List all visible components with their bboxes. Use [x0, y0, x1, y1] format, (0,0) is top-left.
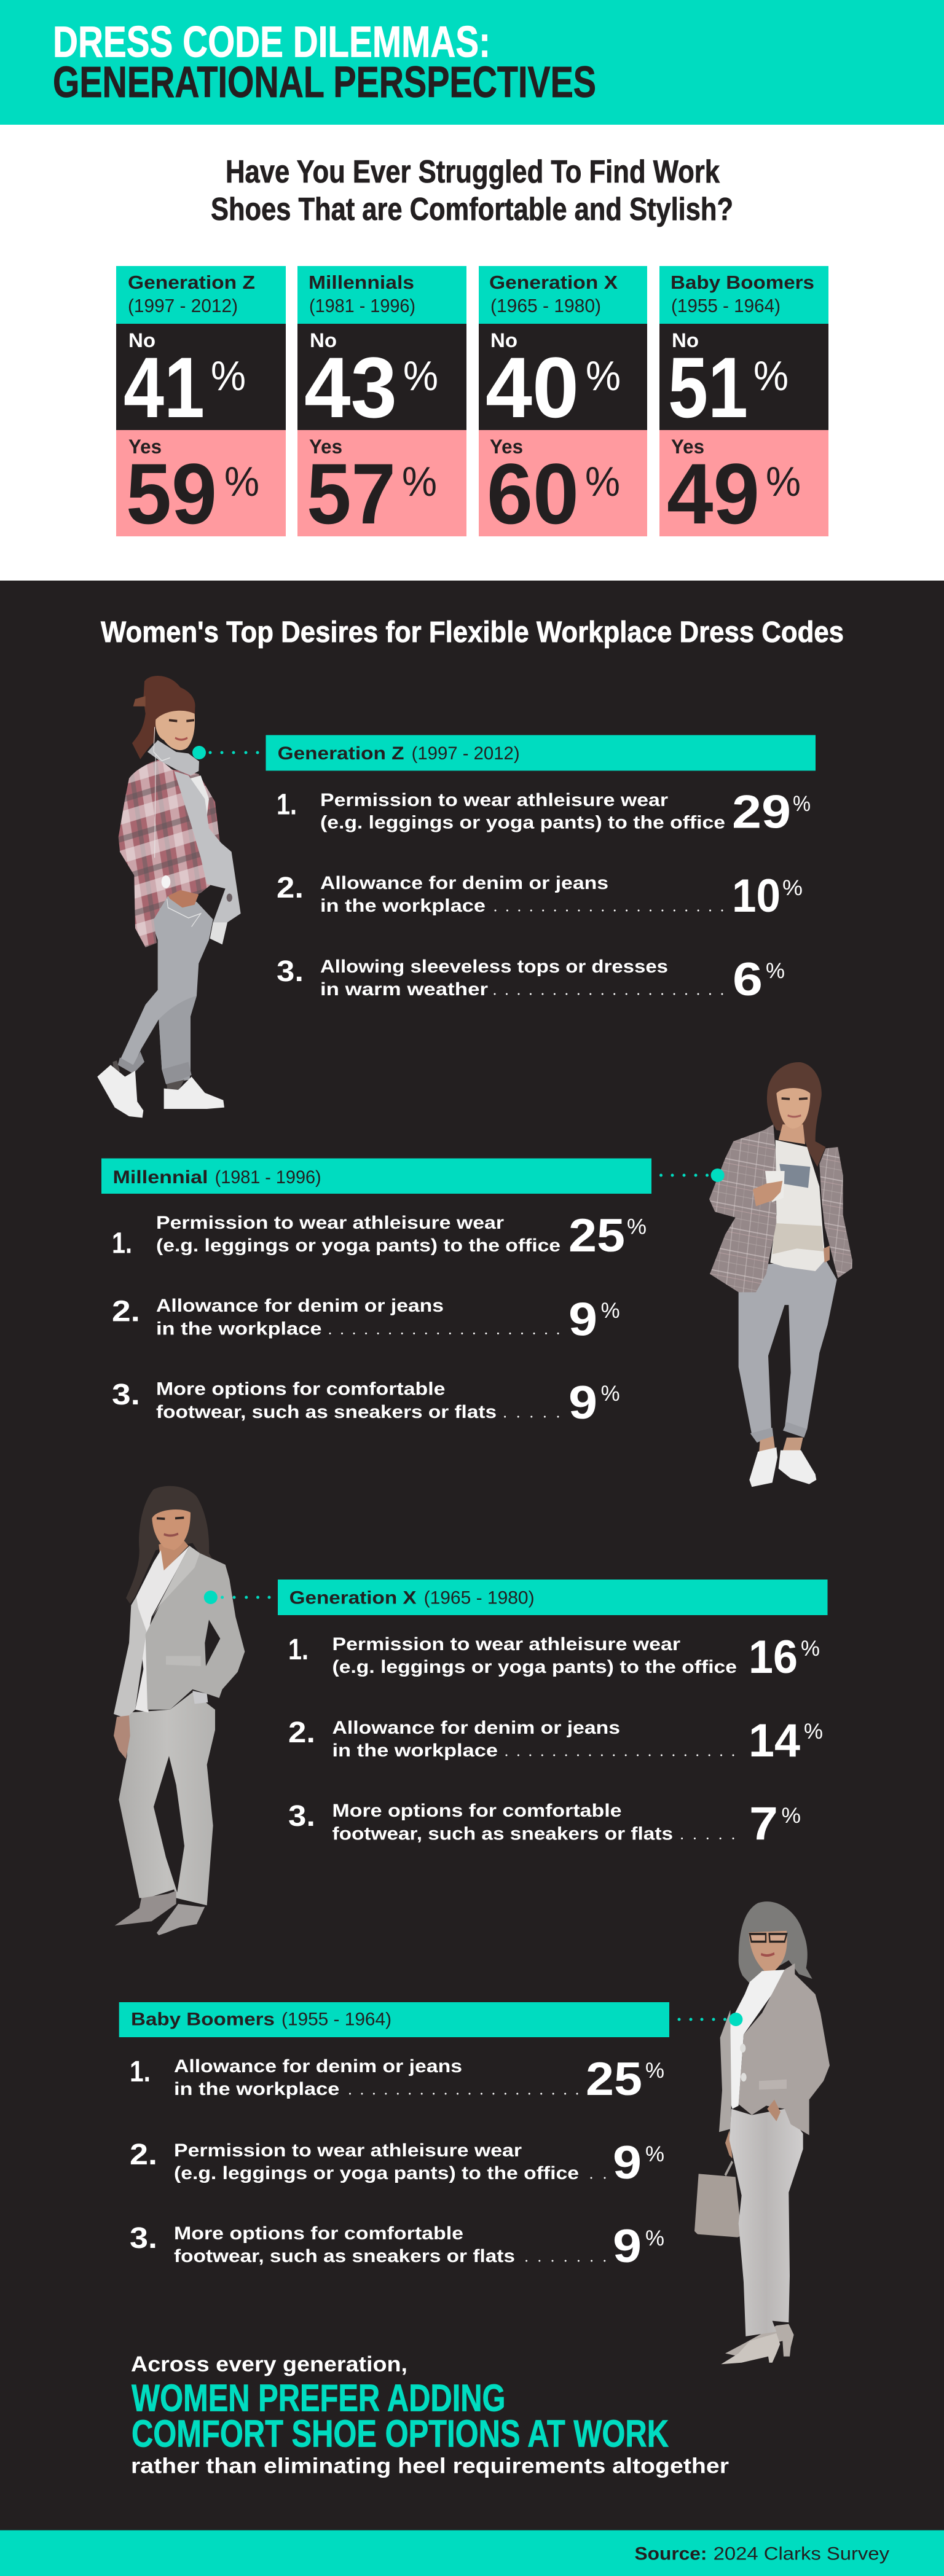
ranked item 3: footwear 7%: More options for comfortable — [332, 1801, 622, 1821]
survey question heading — [211, 154, 733, 227]
ranked item 3: footwear 9%: 9 — [613, 2220, 642, 2273]
heading bar: Generation X — [278, 1580, 827, 1615]
ranked item 1: denim 25%: 25 — [586, 2053, 642, 2105]
ranked item 1: athleisure 16%: (e.g. leggings or yoga pants) to the office — [332, 1657, 737, 1677]
ranked item 2: denim 14%: 14 — [749, 1715, 800, 1767]
connector: Generation Z — [192, 746, 259, 759]
panel: Millennial desires — [101, 1159, 725, 1429]
panel: Generation Z stat card — [116, 266, 286, 542]
panel: Baby Boomers stat card: Baby Boomers — [671, 272, 814, 293]
panel: Generation X stat card: 40 — [486, 339, 579, 436]
panel: Generation X stat card: (1965 - 1980) — [490, 295, 601, 316]
ranked item 3: sleeveless 6%: Allowing sleeveless tops or dresses — [320, 957, 668, 977]
ranked item 1: denim 25%: Allowance for denim or jeans — [174, 2056, 462, 2077]
ranked item 2: denim 10%: 10 — [732, 870, 781, 922]
title banner: GENERATIONAL PERSPECTIVES — [53, 58, 596, 107]
ranked item 2: denim 10%: % — [782, 876, 803, 900]
ranked item 1: denim 25% — [130, 2053, 664, 2105]
heading bar: Baby Boomers: Baby Boomers — [131, 2010, 275, 2030]
panel: Generation Z stat card: % — [224, 458, 259, 505]
ranked item 3: sleeveless 6%: in warm weather — [320, 979, 488, 1000]
ranked item 2: athleisure 9%: % — [645, 2142, 664, 2166]
panel: Generation X stat card: Yes — [490, 436, 523, 458]
panel: Generation X stat card: % — [586, 353, 621, 399]
panel: Millennials stat card: 43 — [304, 339, 397, 436]
ranked item 2: denim 14%: % — [804, 1720, 823, 1744]
ranked item 2: denim 14%: in the workplace — [332, 1740, 498, 1761]
ranked item 3: sleeveless 6%: 6 — [733, 953, 763, 1006]
survey question heading: Shoes That are Comfortable and Stylish? — [211, 192, 733, 227]
ranked item 1: athleisure 29%: Permission to wear athleisure wear — [320, 790, 668, 810]
ranked item 3: sleeveless 6%: % — [766, 959, 785, 983]
panel: Millennials stat card: Millennials — [309, 272, 414, 293]
survey question heading: Have You Ever Struggled To Find Work — [226, 154, 720, 190]
panel: Millennials stat card: 57 — [307, 445, 396, 542]
panel: Baby Boomers stat card — [659, 266, 828, 542]
ranked item 1: athleisure 29% — [277, 786, 811, 838]
ranked item 2: denim 9%: Allowance for denim or jeans — [156, 1296, 444, 1316]
ranked item 3: footwear 9%: % — [645, 2226, 664, 2250]
connector: Millennial — [659, 1169, 725, 1182]
callout: closing takeaway — [131, 2352, 729, 2478]
ranked item 2: denim 14%: Allowance for denim or jeans — [332, 1718, 620, 1738]
panel: Baby Boomers desires — [119, 2002, 742, 2273]
panel: Baby Boomers stat card: % — [753, 353, 789, 399]
ranked item 1: denim 25%: in the workplace — [174, 2079, 339, 2099]
heading bar: Generation X: (1965 - 1980) — [424, 1587, 535, 1608]
heading bar: Millennial: (1981 - 1996) — [215, 1167, 321, 1188]
ranked item 2: denim 14% — [288, 1715, 823, 1767]
figure: Generation X woman in grey suit — [114, 1486, 245, 1935]
heading bar: Baby Boomers: (1955 - 1964) — [281, 2010, 391, 2030]
ranked item 1: athleisure 25%: Permission to wear athleisure wear — [156, 1213, 504, 1233]
source footer bar: 2024 Clarks Survey — [714, 2544, 889, 2564]
figure: Millennial woman in checked blazer — [709, 1062, 852, 1487]
ranked item 2: denim 14%: 2. — [288, 1717, 315, 1749]
panel: Generation X stat card — [479, 266, 647, 542]
panel: Baby Boomers stat card: % — [766, 458, 801, 505]
callout: closing takeaway: COMFORT SHOE OPTIONS AT WORK — [132, 2413, 669, 2455]
ranked item 2: denim 9%: in the workplace — [156, 1319, 322, 1339]
panel: Generation Z stat card: Generation Z — [128, 272, 255, 293]
ranked item 1: athleisure 16%: 16 — [749, 1631, 798, 1683]
ranked item 3: footwear 7%: 7 — [749, 1798, 778, 1850]
connector: Baby Boomers — [677, 2013, 742, 2026]
connector: Generation X — [204, 1591, 270, 1604]
section heading: flexible dress codes: Women's Top Desires for Flexible Workplace Dress Codes — [101, 616, 844, 649]
ranked item 1: athleisure 25% — [112, 1210, 647, 1262]
panel: Baby Boomers stat card: 51 — [668, 339, 748, 436]
source footer bar: Source: — [634, 2544, 707, 2564]
ranked item 3: footwear 7%: % — [782, 1804, 801, 1828]
ranked item 3: footwear 9%: More options for comfortable — [174, 2223, 463, 2244]
callout: closing takeaway: Across every generation, — [131, 2352, 407, 2376]
panel: Millennials stat card: (1981 - 1996) — [309, 295, 415, 316]
ranked item 2: denim 10%: in the workplace — [320, 896, 486, 916]
ranked item 1: denim 25%: % — [645, 2059, 664, 2083]
heading bar: Baby Boomers — [119, 2002, 669, 2037]
ranked item 1: athleisure 29%: 1. — [277, 789, 297, 821]
ranked item 3: sleeveless 6% — [277, 953, 785, 1006]
panel: Generation Z stat card: No — [128, 329, 155, 351]
panel: Generation X stat card: Generation X — [489, 272, 618, 293]
ranked item 2: denim 9%: % — [601, 1299, 620, 1323]
panel: Baby Boomers stat card: No — [672, 329, 699, 351]
heading bar: Generation X: Generation X — [289, 1587, 417, 1608]
panel: Baby Boomers stat card: 49 — [667, 445, 760, 542]
ranked item 1: athleisure 16%: % — [801, 1637, 820, 1661]
ranked item 2: denim 10% — [277, 870, 803, 922]
ranked item 3: footwear 9% — [112, 1377, 620, 1429]
ranked item 1: athleisure 16%: Permission to wear athleisure wear — [332, 1634, 680, 1654]
ranked item 2: athleisure 9%: 2. — [130, 2139, 157, 2171]
source footer bar — [0, 2530, 944, 2576]
ranked item 3: footwear 9%: More options for comfortable — [156, 1379, 445, 1400]
panel: Millennials stat card: % — [402, 458, 437, 505]
ranked item 1: athleisure 25%: 25 — [568, 1210, 625, 1262]
ranked item 1: denim 25%: 1. — [130, 2056, 151, 2088]
panel: Millennials stat card: No — [310, 329, 337, 351]
panel: Generation Z stat card: 41 — [124, 339, 205, 436]
ranked item 3: sleeveless 6%: 3. — [277, 955, 304, 988]
ranked item 2: denim 10%: Allowance for denim or jeans — [320, 873, 608, 893]
ranked item 3: footwear 9%: 3. — [130, 2222, 157, 2255]
ranked item 2: athleisure 9% — [130, 2137, 664, 2189]
ranked item 2: athleisure 9%: Permission to wear athleisure wear — [174, 2140, 522, 2161]
page background: dark section — [0, 581, 944, 2531]
heading bar: Generation Z: Generation Z — [278, 743, 404, 764]
panel: Generation Z desires — [192, 735, 816, 1006]
ranked item 1: athleisure 29%: % — [793, 792, 811, 816]
ranked item 3: footwear 9%: footwear, such as sneakers or flats — [156, 1402, 497, 1422]
panel: Millennials stat card: Yes — [309, 436, 342, 458]
ranked item 3: footwear 7%: 3. — [288, 1800, 315, 1833]
ranked item 3: footwear 7% — [288, 1798, 801, 1850]
panel: Baby Boomers stat card: Yes — [671, 436, 704, 458]
ranked item 3: footwear 7%: footwear, such as sneakers or flats — [332, 1823, 673, 1844]
ranked item 2: denim 9%: 2. — [112, 1296, 140, 1328]
ranked item 3: footwear 9%: 9 — [568, 1377, 597, 1429]
panel: Baby Boomers stat card: (1955 - 1964) — [671, 295, 781, 316]
heading bar: Millennial — [101, 1159, 651, 1194]
panel: Generation Z stat card: 59 — [126, 445, 217, 542]
white survey section background — [0, 125, 944, 581]
heading bar: Generation Z: (1997 - 2012) — [412, 743, 520, 764]
ranked item 2: athleisure 9%: 9 — [613, 2137, 642, 2189]
ranked item 1: athleisure 29%: (e.g. leggings or yoga pants) to the office — [320, 812, 725, 833]
ranked item 2: denim 9%: 9 — [568, 1294, 597, 1345]
ranked item 3: footwear 9%: 3. — [112, 1379, 140, 1411]
title banner: DRESS CODE DILEMMAS: — [53, 18, 490, 67]
ranked item 2: denim 9% — [112, 1294, 620, 1345]
panel: Generation X desires — [204, 1580, 827, 1850]
heading bar: Generation Z — [266, 735, 816, 770]
ranked item 1: athleisure 25%: % — [627, 1215, 647, 1239]
panel: Generation X stat card: % — [585, 458, 620, 505]
ranked item 1: athleisure 16%: 1. — [288, 1634, 309, 1666]
panel: Generation X stat card: 60 — [487, 445, 579, 542]
panel: Generation X stat card: No — [490, 329, 517, 351]
ranked item 3: footwear 9%: footwear, such as sneakers or flats — [174, 2246, 515, 2266]
ranked item 2: athleisure 9%: (e.g. leggings or yoga pants) to the office — [174, 2163, 579, 2183]
figure: Generation Z woman in plaid shirt — [97, 676, 241, 1118]
panel: Millennials stat card: % — [403, 353, 438, 399]
ranked item 1: athleisure 25%: (e.g. leggings or yoga pants) to the office — [156, 1235, 560, 1256]
ranked item 3: footwear 9%: % — [601, 1382, 620, 1406]
ranked item 3: footwear 9% — [130, 2220, 664, 2273]
heading bar: Millennial: Millennial — [113, 1167, 208, 1188]
panel: Millennials stat card — [297, 266, 466, 542]
panel: Generation Z stat card: Yes — [128, 436, 162, 458]
ranked item 1: athleisure 16% — [288, 1631, 820, 1683]
figure: Baby Boomer woman with briefcase — [694, 1901, 830, 2364]
callout: closing takeaway: rather than eliminating heel requirements altogether — [131, 2454, 729, 2478]
ranked item 1: athleisure 25%: 1. — [112, 1227, 132, 1260]
panel: Generation Z stat card: (1997 - 2012) — [128, 295, 238, 316]
ranked item 2: denim 10%: 2. — [277, 872, 304, 904]
panel: Generation Z stat card: % — [211, 353, 246, 399]
ranked item 1: athleisure 29%: 29 — [732, 786, 791, 838]
callout: closing takeaway: WOMEN PREFER ADDING — [132, 2378, 505, 2420]
title banner — [0, 0, 944, 125]
